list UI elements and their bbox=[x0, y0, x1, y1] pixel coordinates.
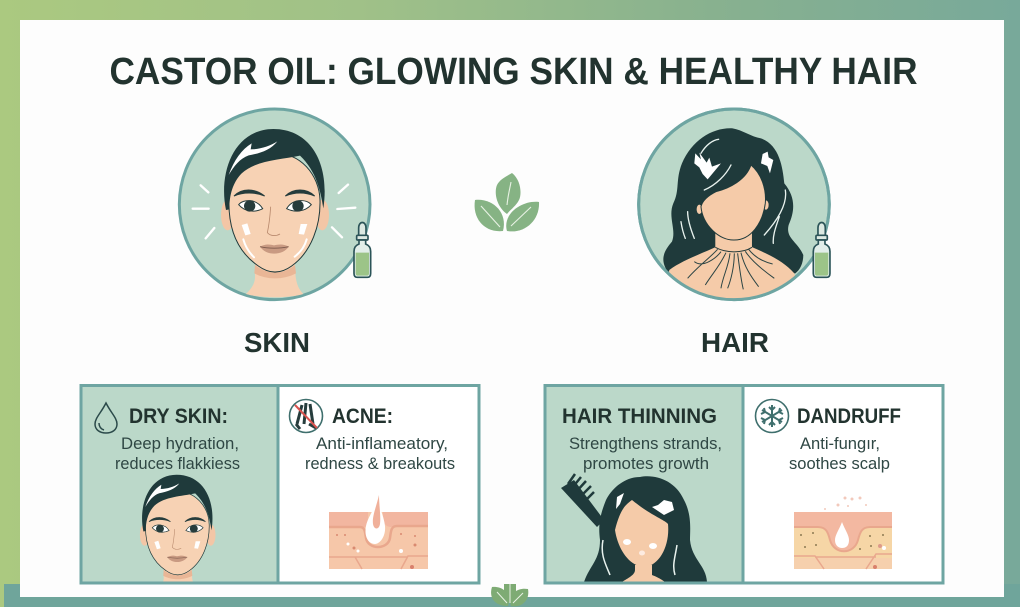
hair thinning description: promotes growth bbox=[583, 454, 709, 473]
acne description: Anti-inflameatory, bbox=[316, 434, 448, 453]
dry skin description: Deep hydration, bbox=[121, 434, 239, 453]
icon: no acne bbox=[290, 400, 322, 432]
hair portrait circle bbox=[639, 109, 830, 310]
face illustration bbox=[221, 129, 329, 297]
dandruff card background bbox=[743, 386, 943, 583]
skin panel group bbox=[81, 385, 479, 593]
bottom band bbox=[4, 584, 1020, 607]
dry skin card background bbox=[81, 386, 278, 583]
neck strands bbox=[688, 249, 774, 289]
small hair figure bbox=[584, 476, 707, 582]
hair thinning heading: HAIR THINNING bbox=[562, 405, 717, 428]
dandruff description: Anti-fungır, bbox=[800, 434, 880, 453]
icon: water drop bbox=[95, 403, 117, 433]
oil bottle bbox=[813, 222, 830, 277]
hair thinning description: Strengthens strands, bbox=[569, 434, 722, 453]
dandruff skin diagram bbox=[794, 496, 892, 569]
icon: snowflake bbox=[756, 400, 788, 432]
skin card frame bbox=[81, 385, 479, 583]
ears bbox=[697, 205, 702, 214]
center leaf icon bbox=[475, 173, 539, 231]
glow rays bbox=[193, 185, 355, 238]
hair panel group bbox=[545, 385, 943, 583]
acne description: redness & breakouts bbox=[305, 454, 455, 473]
neck bbox=[715, 233, 752, 248]
hair mass bbox=[663, 128, 803, 273]
HAIR heading: HAIR bbox=[701, 327, 769, 358]
dry skin description: reduces flakkiess bbox=[115, 454, 240, 473]
dry skin heading: DRY SKIN: bbox=[129, 405, 228, 428]
hair card frame bbox=[545, 385, 943, 583]
hair thinning card background bbox=[545, 386, 743, 583]
small face bbox=[140, 475, 215, 593]
skin portrait circle bbox=[179, 109, 371, 300]
dandruff heading: DANDRUFF bbox=[797, 405, 901, 428]
title: CASTOR OIL: GLOWING SKIN & HEALTHY HAIR bbox=[110, 51, 918, 93]
icon: comb bbox=[561, 474, 604, 527]
hair highlights bbox=[694, 153, 721, 179]
bottom leaf icon bbox=[491, 584, 528, 606]
face bbox=[701, 165, 765, 240]
dandruff description: soothes scalp bbox=[789, 454, 890, 473]
acne skin diagram bbox=[329, 495, 428, 569]
SKIN heading: SKIN bbox=[244, 327, 310, 358]
acne card background bbox=[278, 386, 479, 583]
shoulders bbox=[669, 247, 795, 298]
acne heading: ACNE: bbox=[332, 405, 393, 428]
oil bottle bbox=[354, 222, 371, 277]
